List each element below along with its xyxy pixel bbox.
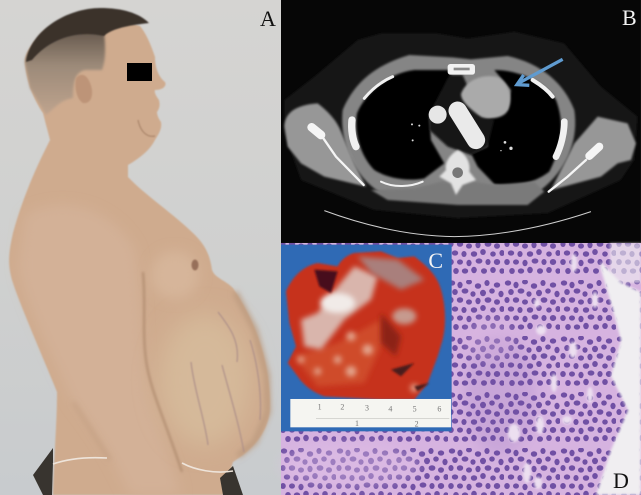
dense dark cell zone [464, 335, 536, 455]
scale ruler: 1 [318, 403, 322, 412]
pale mottling [298, 332, 418, 392]
shoulder muscle, image left [284, 103, 366, 187]
privacy bar over eyes [127, 63, 152, 81]
scale ruler: 2 [415, 420, 419, 429]
ear [75, 75, 92, 103]
scale ruler: 4 [388, 404, 392, 413]
dark hair on top [26, 8, 149, 62]
scale ruler: 1 [355, 419, 359, 428]
chest light area [151, 251, 199, 299]
scapula, image left [312, 127, 364, 185]
CT table [324, 211, 591, 237]
panel B: axial chest CT scan [281, 0, 641, 243]
orange mottled tissue [294, 320, 383, 386]
aorta [458, 111, 476, 140]
lung, image right [471, 70, 561, 185]
scale ruler [290, 399, 451, 429]
dark hemorrhagic area [314, 270, 338, 293]
thymic mass [461, 76, 510, 118]
chin crease [138, 120, 155, 136]
scale ruler: 5 [413, 404, 417, 413]
belly shadow edge [235, 292, 268, 456]
vertebra [439, 150, 476, 195]
deep red area [381, 313, 401, 356]
label: C: C [428, 248, 443, 273]
subcutaneous fat [284, 32, 638, 218]
specimen [286, 251, 445, 400]
arrow pointing to mass [517, 59, 563, 85]
scale ruler: 6 [437, 405, 441, 414]
underwear band: back [33, 448, 53, 495]
body silhouette [9, 15, 270, 495]
pale upper right corner [610, 243, 641, 283]
chest wall muscle ring [342, 55, 575, 197]
belly area [159, 314, 251, 446]
clear slide area at right edge [596, 262, 641, 495]
panel D: histology micrograph [280, 243, 641, 495]
dark lower clots [391, 363, 429, 391]
spinal canal [452, 167, 463, 178]
lung, image left [356, 70, 453, 180]
back muscles [371, 182, 544, 205]
arm light area [18, 205, 180, 495]
brachiocephalic vessel [429, 106, 447, 124]
stretch marks [191, 312, 261, 452]
panel A: lateral photograph of patient [0, 0, 281, 495]
label: D: D [613, 468, 629, 493]
sternum [448, 64, 475, 75]
scapula, image right [549, 147, 599, 192]
panel C: gross specimen photograph [281, 245, 452, 431]
grey capsule [358, 256, 424, 290]
waistband strings [53, 458, 233, 472]
empty spaces between cells [508, 254, 598, 489]
mediastinal fat [429, 75, 494, 155]
shoulder muscle, image right [551, 117, 636, 190]
white necrosis core [320, 293, 355, 313]
pale patch right [392, 308, 416, 324]
scale ruler: 3 [365, 404, 369, 413]
lower arm crease [73, 402, 110, 460]
underwear band: front [220, 466, 243, 495]
buzzed hair [25, 25, 105, 115]
scale ruler: 2 [340, 403, 344, 412]
pale tissue patches [280, 443, 420, 487]
nipple [192, 260, 198, 270]
ribs [352, 77, 564, 186]
arm and belly fold [143, 272, 182, 472]
pulmonary vessel dots [411, 123, 513, 151]
label: A: A [260, 6, 276, 31]
pale necrotic tissue [301, 266, 378, 350]
label: B: B [622, 5, 637, 30]
